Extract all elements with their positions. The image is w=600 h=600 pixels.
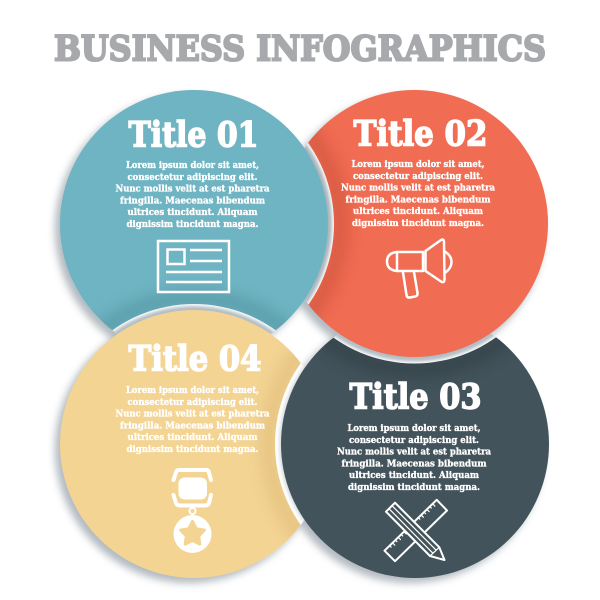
text block: title 01: fringilla. Maecenas bibendum	[120, 196, 265, 206]
drop shadows	[55, 95, 544, 583]
text block: title 04: fringilla. Maecenas bibendum	[120, 420, 265, 432]
text block: title 01: Lorem ipsum dolor sit amet,	[126, 160, 259, 171]
panel: title 01 circle	[60, 90, 328, 330]
text block: title 01	[116, 160, 270, 230]
text block: title 03: fringilla. Maecenas bibendum	[342, 458, 486, 470]
title: BUSINESS INFOGRAPHICS	[54, 28, 546, 70]
text block: title 02: Lorem ipsum dolor sit amet,	[352, 159, 484, 170]
heading: title 02: Title 02	[354, 114, 488, 154]
icon: ruler and pencil	[384, 500, 447, 561]
text block: title 04: ultrices tincidunt. Aliquam	[128, 432, 258, 443]
icon: megaphone	[387, 240, 452, 298]
text block: title 03: Nunc mollis velit at est pharetra	[337, 446, 491, 458]
text block: title 01: ultrices tincidunt. Aliquam	[128, 207, 258, 218]
text block: title 02: dignissim tincidunt magna.	[352, 218, 484, 229]
text block: title 02: Nunc mollis velit at est pharetra	[341, 182, 495, 194]
text block: title 02	[341, 159, 495, 229]
heading: title 04: Title 04	[128, 338, 262, 380]
text block: title 03	[337, 423, 491, 493]
text block: title 04: Lorem ipsum dolor sit amet,	[126, 385, 259, 396]
panel: title 03 circle	[281, 337, 549, 578]
text block: title 04: Nunc mollis velit at est pharetra	[116, 408, 270, 420]
text block: title 02: ultrices tincidunt. Aliquam	[353, 206, 483, 217]
text block: title 04	[116, 385, 270, 455]
text block: title 03: Lorem ipsum dolor sit amet,	[348, 423, 480, 434]
heading: title 03: Title 03	[350, 376, 482, 418]
text block: title 03: consectetur adipiscing elit.	[349, 435, 479, 446]
gap shadows	[72, 134, 494, 560]
text block: title 02: consectetur adipiscing elit.	[353, 171, 483, 182]
panel: title 02 circle	[308, 90, 548, 357]
text block: title 01: Nunc mollis velit at est pharetra	[116, 184, 270, 194]
text block: title 01: consectetur adipiscing elit.	[128, 172, 258, 183]
icon: id card	[158, 241, 229, 292]
text block: title 03: ultrices tincidunt. Aliquam	[349, 470, 479, 481]
text block: title 04: dignissim tincidunt magna.	[126, 444, 258, 455]
text block: title 02: fringilla. Maecenas bibendum	[346, 194, 490, 206]
heading: title 01: Title 01	[128, 114, 258, 156]
text block: title 04: consectetur adipiscing elit.	[128, 397, 258, 408]
icon: medal	[174, 470, 212, 553]
text block: title 03: dignissim tincidunt magna.	[348, 482, 480, 493]
panel: title 04 circle	[60, 310, 301, 578]
text block: title 01: dignissim tincidunt magna.	[126, 219, 258, 230]
